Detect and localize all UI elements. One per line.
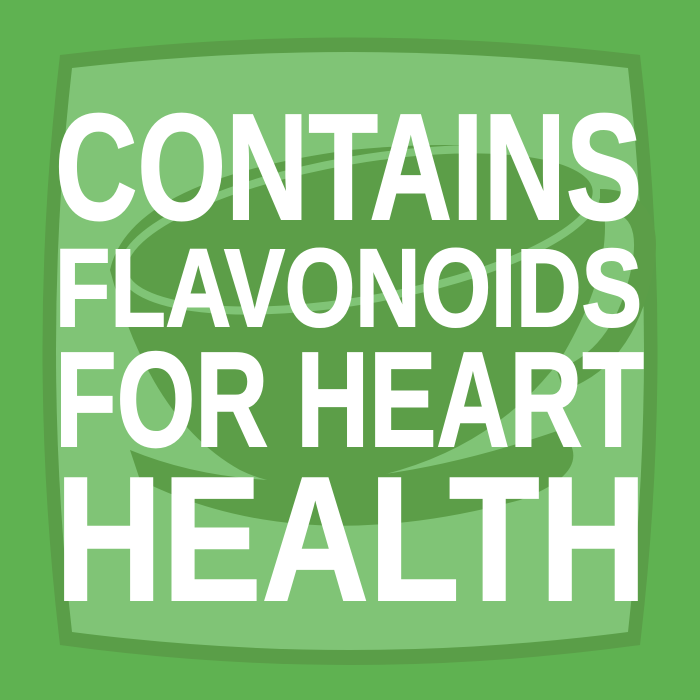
panel: rounded frame — [42, 38, 658, 665]
icon: tea cup background — [110, 119, 645, 526]
title text — [55, 82, 647, 638]
